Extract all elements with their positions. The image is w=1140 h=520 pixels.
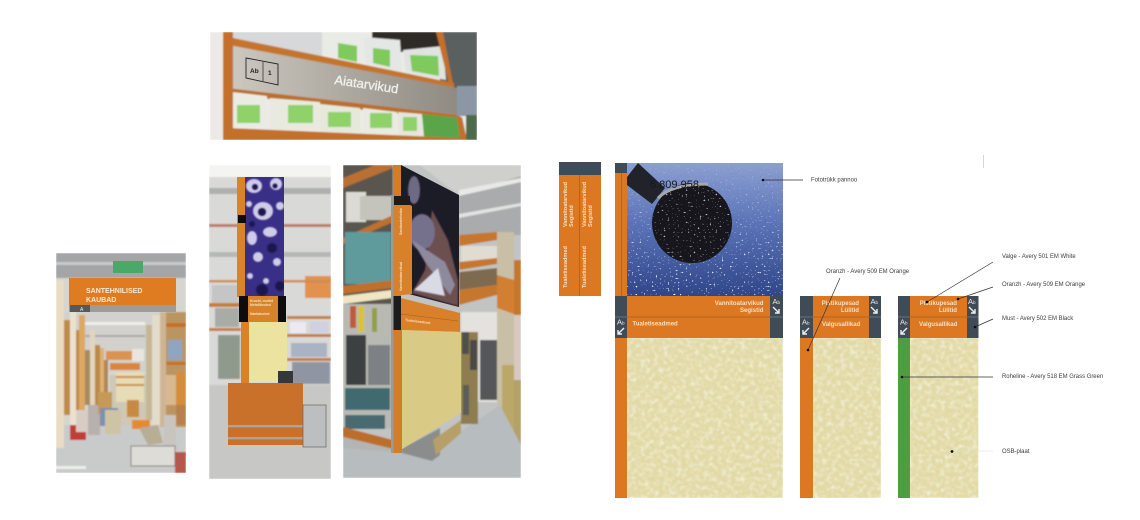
callout: black vinyl: [974, 316, 1073, 328]
vertical labels, left column: Segistid: [569, 205, 575, 227]
orange label band: Vannitoatarvikud: [715, 301, 764, 307]
callout: green vinyl: Roheline - Avery 518 EM Grass Green: [1002, 374, 1103, 380]
OSB board: [813, 338, 881, 498]
sign label: Aiatarvikud: [334, 72, 399, 96]
orange edge strip: [615, 173, 627, 498]
label band: Valgusallikad: [919, 322, 958, 328]
label band: Pistikupesad: [920, 301, 957, 307]
orange edge strip: [800, 338, 813, 498]
column lower sign and board: Naelatooted: [250, 312, 269, 316]
orange label band: Tualetiseadmed: [632, 322, 678, 328]
column orange sign: Sanitaartehnika: [399, 207, 403, 235]
vertical labels, left column: [563, 181, 575, 288]
green edge strip: [898, 338, 910, 498]
sign code box: [246, 58, 278, 85]
vertical labels, left column: Vannitoatarvikud: [563, 181, 569, 227]
small vertical sign layout: [559, 162, 601, 296]
photo: garden shelf sign Aiatarvikud: [210, 32, 477, 140]
vertical labels, right column: Vannitoatarvikud: [582, 181, 588, 227]
callout: orange vinyl: [957, 282, 1086, 300]
print number: 6 809 958: [650, 179, 699, 191]
label band: Valgusallikad: [822, 322, 861, 328]
sign code box: Ab: [250, 68, 259, 75]
panel: large column with shower print: [615, 163, 783, 498]
photo: freestanding column with purple print: [209, 165, 331, 479]
callout: orange strip: Oranzh - Avery 509 EM Orange: [826, 269, 910, 275]
orange label band: Ab: [772, 297, 781, 306]
column lower sign and board: Metallitooted: [250, 303, 271, 307]
hanging orange sign: KAUBAD: [86, 297, 116, 304]
column orange sign: Vannitoatarvikud: [399, 262, 403, 291]
photo: store aisle with hanging sign: [56, 253, 186, 473]
hanging orange sign: A: [80, 307, 84, 313]
column lower sign and board: Kruvid, mutrid: [250, 299, 273, 303]
label band: Ab: [968, 297, 976, 306]
vertical labels, left column: Tualetiseadmed: [563, 246, 569, 288]
photo: shelving column with metal print: [343, 165, 521, 478]
column orange sign: Tualetiseadmed: [405, 318, 431, 325]
panel: orange edge column: [800, 296, 881, 498]
panel: green edge column: [898, 296, 978, 498]
label band: Lülitid: [841, 308, 859, 314]
callout: white vinyl: Valge - Avery 501 EM White: [1002, 254, 1076, 260]
column purple print: [245, 177, 285, 297]
label band: [800, 296, 881, 338]
shower photo print: [627, 163, 783, 296]
label band: [898, 296, 978, 338]
hanging orange sign: [69, 278, 176, 313]
callout: orange vinyl: Oranzh - Avery 509 EM Orange: [1002, 282, 1086, 288]
column metal print: [401, 165, 459, 307]
sign code box: 1: [268, 70, 272, 77]
callout: OSB board: OSB-plaat: [1002, 449, 1030, 455]
exit sign: [113, 261, 143, 273]
callout: orange strip: [807, 269, 910, 351]
label band: Pistikupesad: [822, 301, 859, 307]
OSB board: [910, 338, 978, 498]
column lower sign and board: [237, 177, 287, 383]
callout: photo print: Fototrükk pannoo: [811, 178, 858, 184]
callout: photo print: [762, 178, 858, 184]
label band: Lülitid: [939, 308, 957, 314]
orange label band: [615, 296, 783, 338]
label band: Ab: [900, 318, 908, 326]
label band: Ab: [870, 297, 879, 306]
orange label band: Segistid: [740, 308, 764, 314]
top cap: [615, 163, 627, 173]
callout: OSB board: [951, 449, 1030, 455]
vertical labels, right column: Tualetiseadmed: [582, 246, 588, 288]
vertical labels, right column: Segistid: [588, 205, 594, 227]
vertical labels, right column: [582, 181, 594, 288]
hanging orange sign: SANTEHNILISED: [86, 288, 142, 295]
orange label band: Ab: [617, 318, 625, 326]
column orange sign: [391, 165, 461, 453]
OSB board: [627, 338, 783, 498]
label band: Ab: [802, 318, 810, 326]
callout: black vinyl: Must - Avery 502 EM Black: [1002, 316, 1073, 322]
orange service desk: [228, 371, 326, 447]
callout: white vinyl: [926, 254, 1076, 303]
